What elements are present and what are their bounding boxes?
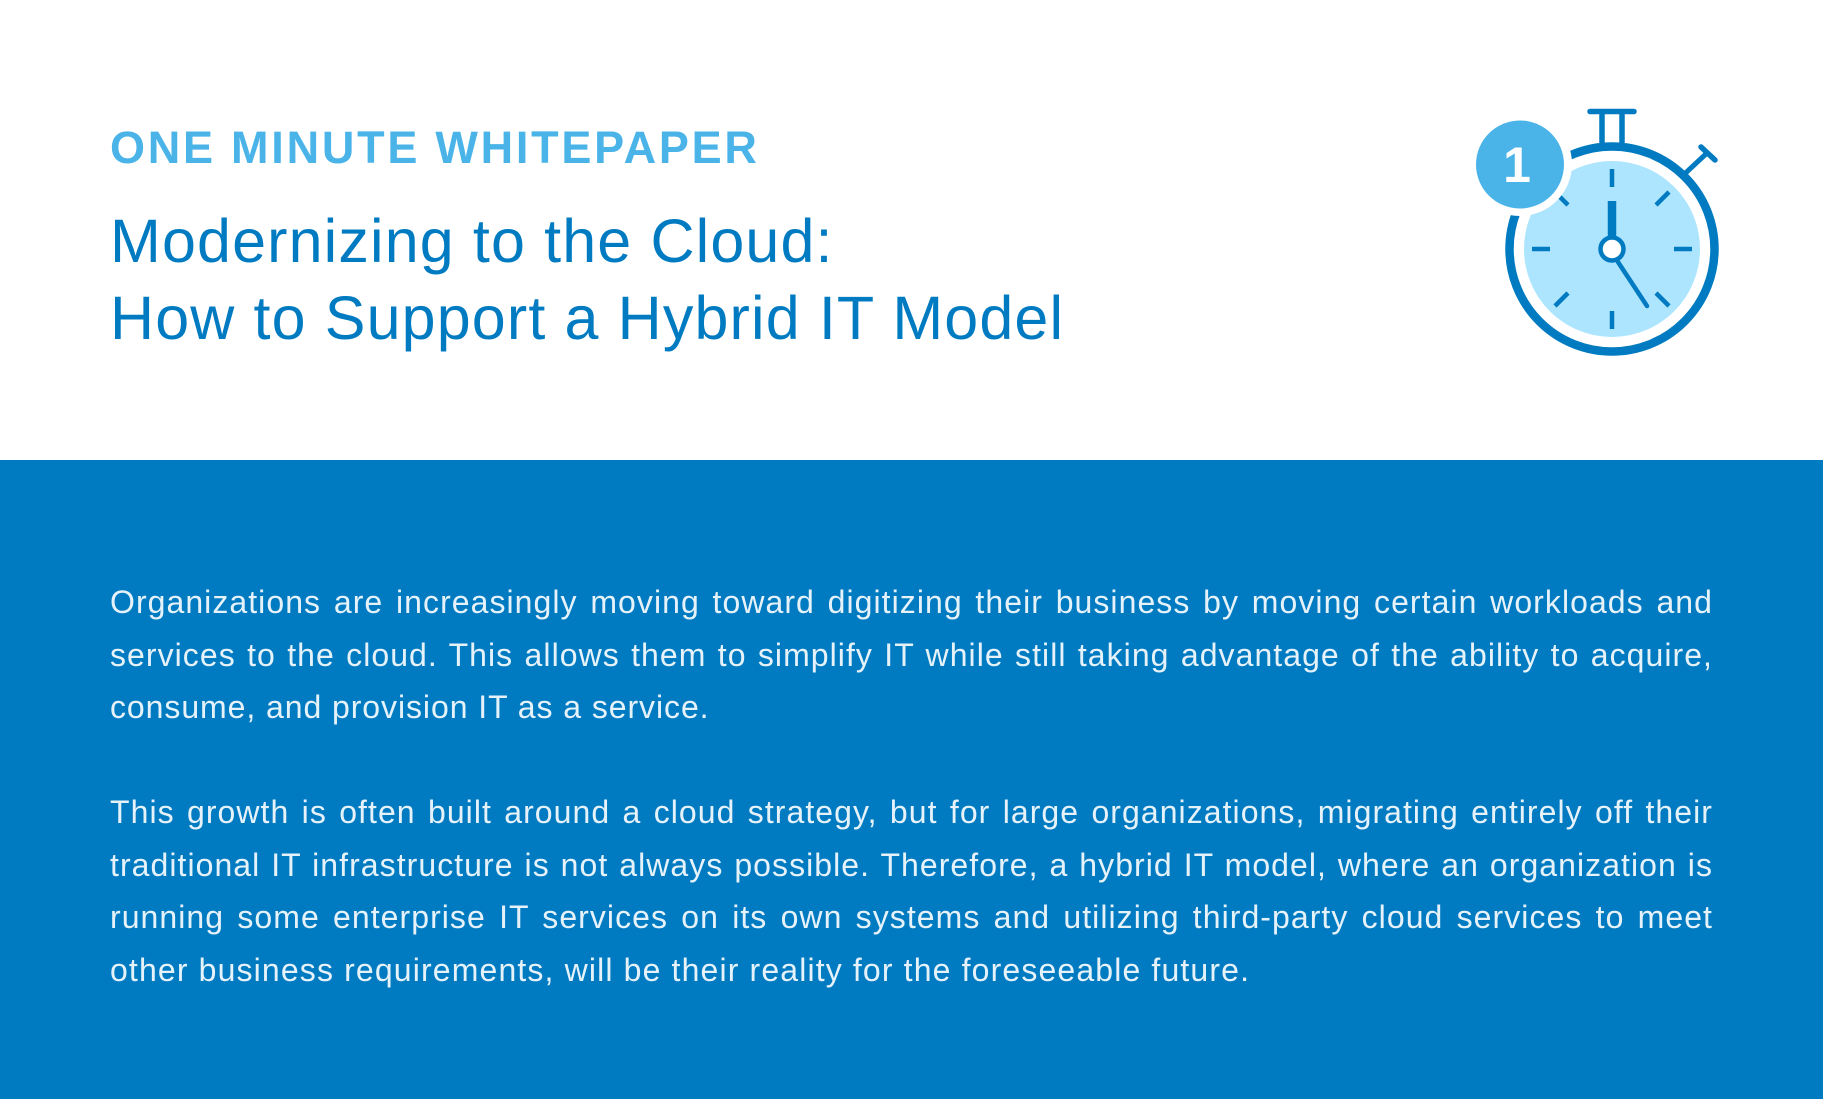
paragraph 2: running some enterprise IT services on its own systems and utilizing third-party cloud services to meet bbox=[110, 899, 1713, 935]
title bbox=[110, 207, 1064, 352]
paragraph 2: This growth is often built around a cloud strategy, but for large organizations, migrating entirely off their bbox=[110, 794, 1713, 830]
paragraph 2 bbox=[110, 794, 1713, 988]
paragraph 2: other business requirements, will be their reality for the foreseeable future. bbox=[110, 952, 1250, 988]
eyebrow heading: ONE MINUTE WHITEPAPER bbox=[110, 122, 760, 173]
body panel bbox=[0, 460, 1823, 1099]
paragraph 1: consume, and provision IT as a service. bbox=[110, 689, 710, 725]
paragraph 2: traditional IT infrastructure is not always possible. Therefore, a hybrid IT model, where an organization is bbox=[110, 846, 1713, 882]
paragraph 1 bbox=[110, 584, 1713, 725]
paragraph 1: services to the cloud. This allows them to simplify IT while still taking advantage of the ability to acquire, bbox=[110, 636, 1713, 672]
header panel bbox=[0, 0, 1823, 460]
paragraph 1: Organizations are increasingly moving toward digitizing their business by moving certain workloads and bbox=[110, 584, 1713, 620]
icon: stopwatch with number 1 badge: 1 bbox=[1503, 137, 1531, 193]
title: Modernizing to the Cloud: bbox=[110, 207, 834, 275]
title: How to Support a Hybrid IT Model bbox=[110, 284, 1064, 352]
icon: stopwatch with number 1 badge bbox=[1476, 108, 1719, 356]
